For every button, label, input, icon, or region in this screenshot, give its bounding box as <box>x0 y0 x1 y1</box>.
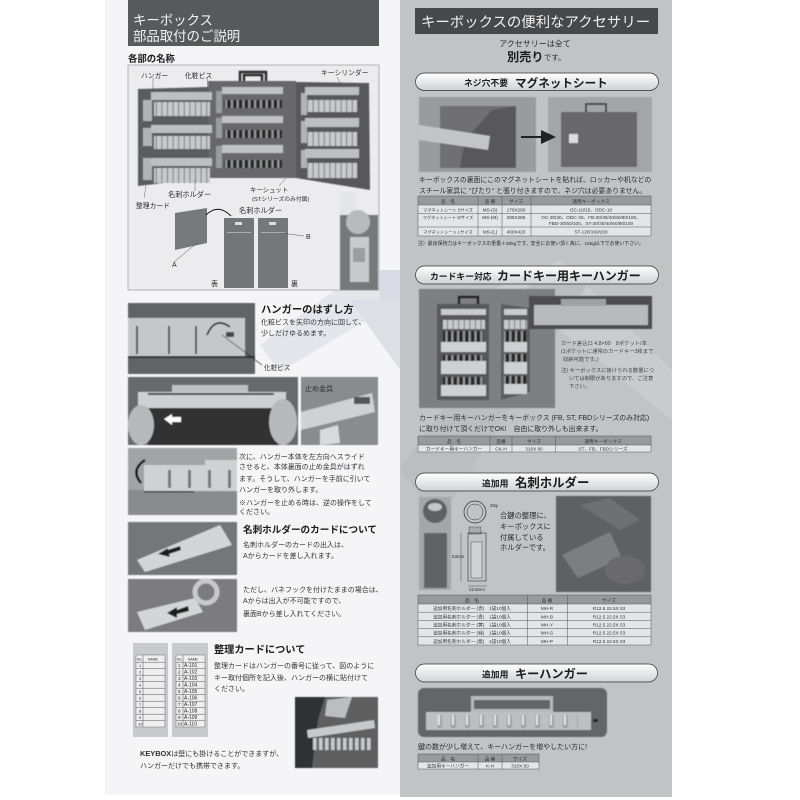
table: magnet sheet: FBD-30/60/100、ST-20/30/40/60/80/100 <box>549 221 633 226</box>
table: key hanger: K-H <box>486 764 494 768</box>
text: holder card instructions: ただし、バネフックを付けたままの場合は、 <box>243 585 383 594</box>
table: key hanger: サイズ <box>513 756 527 762</box>
filled index card: No. <box>177 658 182 662</box>
table: key hanger: 品 番 <box>485 756 496 762</box>
table: magnet sheet: ST-120/160/200 <box>574 230 608 234</box>
section: additional key hanger <box>416 664 658 770</box>
table: holders: 追加用名刺ホルダー (赤) 1袋10個入 <box>433 605 511 612</box>
table: holders: 追加用名刺ホルダー (青) 1袋10個入 <box>433 613 511 620</box>
table: holders: R12.5 22.5X 53 <box>593 606 626 611</box>
text: index card instructions: ください。 <box>214 685 249 693</box>
filled index card: A-105 <box>184 689 198 695</box>
blank index card: 9 <box>139 715 142 720</box>
table: holders <box>418 595 651 645</box>
text: magnet sheet description <box>419 175 652 195</box>
filled index card: NAME <box>188 658 199 662</box>
title banner: parts installation: キーボックス <box>133 13 213 28</box>
table: holders: 品 番 <box>542 597 553 604</box>
text: slide instructions: 次に、ハンガー本体を左方向へスライド <box>239 452 365 461</box>
heading: holder card: 名刺ホルダーのカードについて <box>243 524 377 536</box>
text: slide instructions: させると、本体裏面の止め金具がはずれ <box>239 462 365 471</box>
title banner: accessories <box>415 8 658 34</box>
text: card key hanger specs: (1ポケットに通常のカードキー3枚まで <box>561 347 653 355</box>
table: key hanger <box>418 754 539 770</box>
text: loosen screw: 少しだけゆるめます。 <box>261 328 330 338</box>
text: key hanger description: 鍵の数が少し増えて、キーハンガーを増やしたい方に! <box>418 742 587 751</box>
filled index card: 1 <box>178 663 181 668</box>
filled index card: A-102 <box>184 670 198 676</box>
heading pill: key hanger <box>416 664 658 682</box>
text: index card instructions <box>214 661 374 693</box>
blank index card: 8 <box>139 708 142 714</box>
text: sold separately: アクセサリーは全て <box>499 38 571 48</box>
label: decorative screw: 化粧ビス <box>264 363 290 372</box>
section: card key hanger <box>416 266 658 452</box>
text: holder card instructions <box>243 540 383 618</box>
table: holders: MH-Y <box>541 622 554 628</box>
photo: sliding hanger <box>128 377 298 445</box>
heading pill: key hanger: 追加用 <box>482 668 508 680</box>
heading pill: card key hanger: カードキー対応 <box>430 270 492 282</box>
table: magnet sheet: サイズ <box>509 198 523 205</box>
text: card key hanger specs: 収納可能です。) <box>563 355 599 363</box>
text: card key hanger description: に取り付けて頂くだけでOK! 自由に取り外しも出来ます。 <box>419 424 602 433</box>
blank index card: 2 <box>139 670 142 674</box>
table: holders: R12.5 22.5X 53 <box>593 639 626 644</box>
table: magnet sheet: 400X420 <box>507 230 526 234</box>
heading pill: card key hanger: カードキー用キーハンガー <box>497 268 641 283</box>
filled index card: A-110 <box>184 722 197 728</box>
photo: card insert B <box>128 579 237 632</box>
text: sold separately: です。 <box>544 53 565 62</box>
blank index card: No. <box>137 658 142 662</box>
diagram: business card holder front and back: B <box>306 234 311 241</box>
filled index card: A-103 <box>184 676 198 682</box>
table: magnet sheet: 適用キーボックス <box>572 198 610 205</box>
table: card key hanger <box>418 436 651 452</box>
table: holders: R12.5 22.5X 53 <box>593 614 626 619</box>
filled index card: A-108 <box>184 708 198 714</box>
table: card key hanger: カードキー用キーハンガー <box>426 446 482 452</box>
diagram: business card holder front and back <box>172 206 311 288</box>
blank index card <box>136 655 165 727</box>
table: magnet sheet: 品 名 <box>441 198 455 205</box>
text: holder card instructions: Aからカードを差し入れます。 <box>243 551 338 560</box>
photo: card key hanger detail <box>529 296 652 329</box>
text: card key hanger specs: 注) キーボックスに掛けられる数量につ <box>561 366 654 374</box>
table: magnet sheet: 170X290 <box>507 208 526 212</box>
text: magnet sheet description: キーボックスの裏面にこのマグネットシートを貼れば、ロッカーや机などの <box>419 175 652 184</box>
heading: how to remove hanger: ハンガーのはずし方 <box>261 303 354 316</box>
text: loosen screw <box>261 318 365 338</box>
photo: key box with magnet <box>548 97 652 172</box>
table: magnet sheet: マグネットシート Mサイズ <box>423 214 473 221</box>
heading pill: holder <box>416 473 658 491</box>
filled index card <box>176 655 205 728</box>
table: magnet sheet: OC-20/30、ODC-30、FB-20/30/40/60/80/100、 <box>541 215 641 220</box>
index cards illustration <box>133 643 208 737</box>
heading pill: card key hanger <box>416 266 658 284</box>
table: card key hanger: サイズ <box>527 438 541 445</box>
diagram: holder dimensions <box>452 501 498 592</box>
heading: index cards: 整理カードについて <box>214 643 305 656</box>
text: card key hanger description <box>419 413 649 433</box>
heading pill: magnet sheet: ネジ穴不要 <box>464 77 508 88</box>
text: holder description <box>500 511 551 552</box>
text: loosen screw: 化粧ビスを矢印の方向に回して、 <box>261 318 365 326</box>
heading pill: key hanger: キーハンガー <box>515 666 588 681</box>
heading pill: magnet sheet <box>416 73 658 90</box>
table: magnet sheet: 品 番 <box>485 198 496 205</box>
filled index card: 6 <box>178 696 181 700</box>
filled index card: 9 <box>178 715 181 720</box>
text: holder card instructions: 名刺ホルダーのカードの出入は、 <box>243 540 348 549</box>
note: magnet load: 注）最良保持力はキーボックスの重量＋30kgです。安全にお使い頂く為に、15kg以下でお使い下さい。 <box>418 240 644 247</box>
table: magnet sheet: MS-(M) <box>482 215 498 220</box>
diagram: business card holder front and back: 表 <box>211 279 218 288</box>
text: card key hanger specs: カード差込口 4.8×60 8ポケット/本 <box>561 339 648 347</box>
photo: key hanger <box>418 688 607 737</box>
blank index card: 1 <box>139 663 142 668</box>
filled index card: 3 <box>178 676 181 681</box>
table: card key hanger: 品番 <box>496 438 506 445</box>
text: card key hanger specs: 下さい。 <box>569 383 590 390</box>
filled index card: A-101 <box>184 663 198 669</box>
table: magnet sheet: MS-(S) <box>483 208 498 212</box>
photo: bagged holders <box>556 496 651 592</box>
title banner: parts installation: 部品取付のご説明 <box>133 29 240 44</box>
text: index card instructions: キー取付個所を記入後、ハンガーの横に貼付けて <box>214 673 368 682</box>
table: holders: R12.5 22.5X 53 <box>593 622 626 628</box>
table: magnet sheet: 285X285 <box>507 215 526 220</box>
filled index card: 7 <box>178 702 181 707</box>
heading pill: holder: 名刺ホルダー <box>515 475 589 490</box>
blank index card: 10 <box>138 722 143 726</box>
diagram: holder dimensions: 22.5mm <box>469 587 485 592</box>
text: magnet sheet description: スチール家具に "ぴたり" と張り付きますので、ネジ穴は必要ありません。 <box>419 186 646 195</box>
table: key hanger: 品 名 <box>441 756 455 762</box>
photo: stop fitting <box>301 377 378 445</box>
table: holders: MH-G <box>541 631 554 636</box>
table: holders: 追加用名刺ホルダー (黄) 1袋10個入 <box>433 622 511 628</box>
photo: holder <box>419 497 451 590</box>
panel: left page parts guide <box>128 0 383 770</box>
part labels: キーシリンダー <box>321 68 369 77</box>
part labels: 名刺ホルダー <box>168 190 211 199</box>
section: magnet sheet <box>416 73 658 247</box>
filled index card: 10 <box>177 722 183 726</box>
diagram: business card holder front and back: A <box>172 262 177 269</box>
text: card key hanger specs: いては制限がありますので、ご注意 <box>569 374 654 382</box>
text: index card instructions: 整理カードはハンガーの番号に従って、図のように <box>214 661 374 670</box>
photo: carrying hanger <box>295 697 378 768</box>
part labels: ハンガー <box>141 71 168 80</box>
table: magnet sheet: MS-(L) <box>483 230 498 234</box>
text: KEYBOX portability note: ハンガーだけでも携帯できます。 <box>140 761 244 770</box>
text: holder description: ホルダーです。 <box>500 543 550 552</box>
text: card key hanger specs <box>561 339 654 390</box>
filled index card: 8 <box>178 708 181 714</box>
text: slide instructions: ください。 <box>239 508 274 516</box>
text: slide instructions: ハンガーを取り外します。 <box>239 485 322 494</box>
arrow: magnet sheet to box <box>521 130 556 144</box>
text: sold separately: 別売り <box>507 49 544 64</box>
table: card key hanger: 適用キーボックス <box>584 438 622 445</box>
heading pill: magnet sheet: マグネットシート <box>515 76 608 90</box>
text: sold separately <box>499 38 571 64</box>
diagram: business card holder front and back: 裏 <box>291 279 298 288</box>
photo: attaching magnet sheet <box>419 97 536 172</box>
diagram: holder dimensions: 53mm <box>452 554 465 559</box>
table: holders: 品 名 <box>465 597 479 604</box>
blank index card: 7 <box>139 702 142 707</box>
table: holders: 追加用名刺ホルダー (緑) 1袋10個入 <box>433 630 511 637</box>
heading pill: holder: 追加用 <box>482 478 508 488</box>
text: slide instructions: ※ハンガーを止める時は、逆の操作をして <box>239 498 372 507</box>
diagram: business card holder front and back: 名刺ホルダー <box>239 206 282 215</box>
table: key hanger: 310X 50 <box>511 764 529 768</box>
part labels: 整理カード <box>136 201 170 210</box>
photo: pull hanger forward <box>128 448 237 515</box>
illustration: open key box <box>138 72 370 190</box>
part labels: キーシュット <box>250 187 288 194</box>
blank index card: 6 <box>139 696 142 700</box>
text: holder card instructions: 裏面Bから差し入れてください。 <box>243 609 345 618</box>
text: card key hanger description: カードキー用キーハンガーをキーボックス (FB, ST, FBDシリーズのみ対応) <box>419 413 649 422</box>
text: holder description: キーボックスに <box>500 522 551 531</box>
filled index card: 4 <box>178 682 181 688</box>
table: key hanger: 追加用キーハンガー <box>427 762 469 770</box>
blank index card: 4 <box>139 682 142 688</box>
section: additional business card holder <box>416 473 658 645</box>
table: card key hanger: 品 名 <box>447 438 461 445</box>
table: magnet sheet: マグネットシート Lサイズ <box>423 228 473 236</box>
heading: part names: 各部の名称 <box>128 53 176 64</box>
table: holders: MH-R <box>541 606 554 611</box>
table: holders: MH-B <box>541 614 553 619</box>
filled index card: 2 <box>178 670 181 674</box>
text: holder description: 合鍵の整理に、 <box>500 511 551 520</box>
photo: box with card hangers <box>419 289 555 408</box>
text: holder description: 付属している <box>500 533 544 542</box>
title banner: accessories: キーボックスの便利なアクセサリー <box>421 14 650 31</box>
photo: card insert A <box>128 522 237 575</box>
filled index card: A-106 <box>184 696 198 702</box>
table: magnet sheet <box>418 196 651 236</box>
part labels <box>136 68 369 210</box>
table: holders: MH-P <box>541 639 553 644</box>
table: magnet sheet: マグネットシート Sサイズ <box>423 206 473 214</box>
blank index card: NAME <box>148 658 159 662</box>
table: holders: サイズ <box>602 597 616 604</box>
photo: hanger with decorative screw <box>128 303 262 374</box>
blank index card: 5 <box>139 689 142 694</box>
filled index card: A-109 <box>184 715 198 721</box>
text: KEYBOX portability note <box>140 749 283 770</box>
text: KEYBOX portability note: KEYBOXは壁にも掛けることができますが、 <box>140 749 283 758</box>
text: slide instructions: ます。そうして、ハンガーを手前に引いて <box>239 474 371 483</box>
filled index card: 5 <box>178 689 181 694</box>
title banner: parts installation <box>128 0 379 46</box>
part labels: (STシリーズのみ付属) <box>252 195 309 203</box>
table: holders: R12.5 22.5X 53 <box>593 631 626 636</box>
table: magnet sheet: OC-10/15、ODC-10 <box>570 208 612 212</box>
table: holders: 追加用名刺ホルダー (紫) 1袋10個入 <box>433 638 511 645</box>
blank index card: 3 <box>139 676 142 681</box>
panel: right page accessories <box>400 0 672 797</box>
diagram: holder dimensions: 25φ <box>490 503 498 508</box>
table: card key hanger: CK-H <box>495 446 507 452</box>
text: holder card instructions: Aからは出入が不可能ですので、 <box>243 596 345 605</box>
photo: holder on hanger <box>340 192 378 290</box>
panel: part names diagram <box>128 65 379 290</box>
table: card key hanger: 310X 80 <box>525 446 543 452</box>
table: card key hanger: ST、FB、FBDシリーズ <box>578 446 628 452</box>
label: stop fitting: 止め金具 <box>305 384 333 393</box>
part labels: 化粧ビス <box>185 71 212 80</box>
filled index card: A-104 <box>184 682 198 688</box>
filled index card: A-107 <box>184 702 198 708</box>
text: slide instructions <box>239 452 372 516</box>
